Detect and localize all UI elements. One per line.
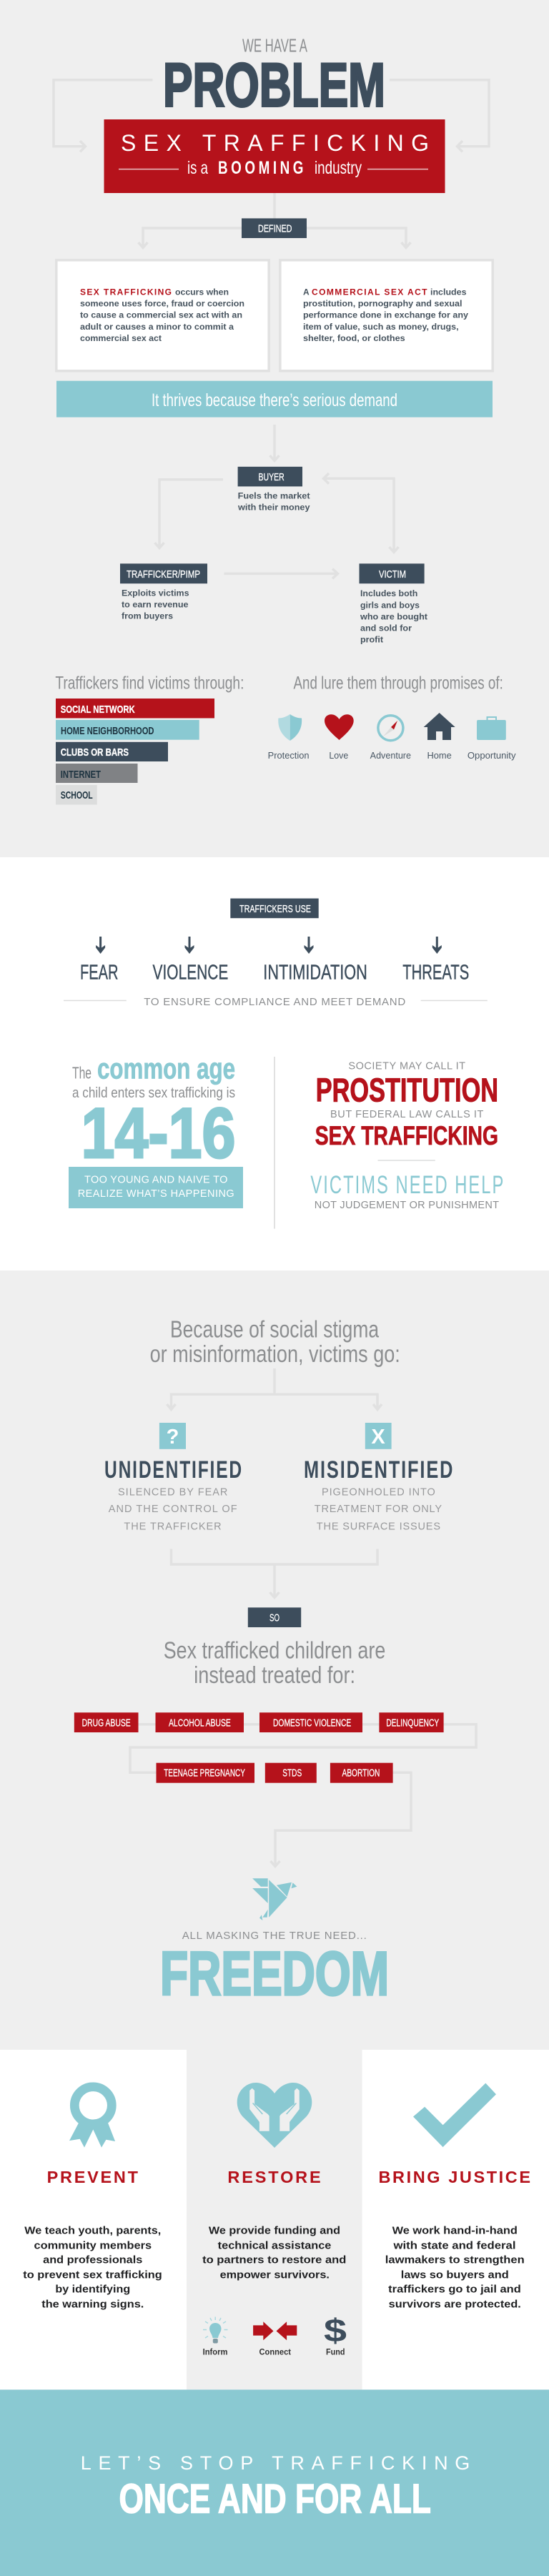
bar: internet: INTERNET	[61, 769, 101, 781]
body: prevent: We teach youth, parents,	[24, 2224, 161, 2236]
connector: treatment chain	[130, 1724, 476, 1866]
icon: home: Home	[427, 751, 452, 761]
body: prevent	[23, 2224, 162, 2310]
definition card: commercial sex act	[280, 260, 493, 371]
tag: alcohol abuse	[156, 1712, 244, 1732]
icon: love heart: Love	[329, 751, 348, 761]
body: restore: technical assistance	[218, 2239, 331, 2251]
item: threats	[402, 937, 469, 984]
icon: love heart	[325, 714, 354, 761]
label: so	[248, 1607, 301, 1627]
heading: problem: PROBLEM	[163, 51, 385, 120]
node: buyer: Fuels the market	[238, 491, 310, 501]
stat: 14-16: 14-16	[81, 1093, 236, 1173]
icon: fund dollar: $	[324, 2312, 347, 2349]
panel: treated for	[74, 1712, 476, 1866]
definition card: sex trafficking: someone uses force, fraud or coercion	[80, 299, 244, 309]
heading: freedom: FREEDOM	[160, 1940, 389, 2008]
panel: call to action	[0, 2389, 549, 2576]
tag: teenage pregnancy: TEENAGE PREGNANCY	[164, 1767, 245, 1780]
tag: teenage pregnancy	[156, 1763, 254, 1783]
definition card: sex trafficking: adult or causes a minor to commit a	[80, 322, 234, 332]
heading: instead treated for: instead treated for:	[194, 1662, 355, 1688]
label: so: SO	[269, 1612, 280, 1624]
definition card: sex trafficking	[56, 260, 269, 371]
item: violence	[153, 937, 228, 984]
icon: protection shield	[268, 714, 310, 761]
node: buyer: with their money	[237, 503, 310, 513]
text: sex trafficking: SEX TRAFFICKING	[315, 1121, 498, 1150]
icon: opportunity briefcase: Opportunity	[468, 751, 516, 761]
definition card: sex trafficking: SEX TRAFFICKING	[80, 287, 172, 297]
node: trafficker/pimp: TRAFFICKER/PIMP	[127, 568, 200, 581]
banner: serious demand: It thrives because there’s serious demand	[152, 390, 397, 410]
node: trafficker/pimp: to earn revenue	[122, 599, 189, 609]
bar chart: where traffickers find victims	[55, 673, 244, 805]
definition card: commercial sex act: COMMERCIAL SEX ACT	[312, 287, 427, 297]
panel: prevent	[0, 2050, 187, 2389]
body: bring justice	[385, 2224, 525, 2310]
banner: sex trafficking is a booming industry: SEX TRAFFICKING	[121, 130, 429, 156]
panel: misidentified	[104, 1316, 454, 1688]
banner: sex trafficking is a booming industry: industry	[315, 158, 362, 178]
column: unidentified: UNIDENTIFIED	[104, 1456, 243, 1484]
icon: origami bird	[252, 1878, 297, 1920]
panel: lures	[268, 673, 516, 761]
item: violence: VIOLENCE	[153, 961, 228, 984]
icon: home	[424, 713, 455, 761]
column: misidentified: TREATMENT FOR ONLY	[315, 1504, 442, 1515]
icon: connect arrows	[253, 2321, 297, 2357]
icon: protection shield: Protection	[268, 751, 310, 761]
panel: prostitution vs sex trafficking	[310, 1060, 505, 1211]
bar: clubs or bars	[56, 742, 168, 761]
column: unidentified	[104, 1423, 243, 1532]
definition card: sex trafficking: occurs when	[175, 287, 229, 297]
body: bring justice: with state and federal	[392, 2239, 516, 2251]
tag: alcohol abuse: ALCOHOL ABUSE	[169, 1717, 231, 1729]
text: the: The	[72, 1064, 92, 1082]
definition card: sex trafficking: commercial sex act	[80, 333, 162, 343]
tag: stds	[265, 1763, 317, 1783]
heading: bring justice: BRING JUSTICE	[379, 2168, 530, 2186]
body: restore: to partners to restore and	[202, 2254, 346, 2266]
body: prevent: to prevent sex trafficking	[23, 2269, 162, 2281]
item: intimidation: INTIMIDATION	[263, 961, 367, 984]
tag: stds: STDS	[282, 1767, 302, 1780]
heading: instead treated for: Sex trafficked children are	[164, 1637, 385, 1664]
text: all masking: ALL MASKING THE TRUE NEED...	[182, 1930, 367, 1942]
banner: serious demand	[56, 381, 493, 418]
node: trafficker/pimp: Exploits victims	[122, 588, 189, 598]
item: threats: THREATS	[402, 961, 469, 984]
definition card: commercial sex act: item of value, such as money, drugs,	[303, 322, 459, 332]
icon: adventure compass	[370, 716, 411, 761]
bar: home neighborhood	[56, 720, 199, 740]
tag: drug abuse: DRUG ABUSE	[82, 1717, 131, 1729]
tag: abortion	[330, 1763, 393, 1783]
body: restore: empower survivors.	[220, 2269, 330, 2281]
body: bring justice: laws so buyers and	[401, 2269, 509, 2281]
column: misidentified: PIGEONHOLED INTO	[322, 1487, 435, 1499]
node: victim: Includes both	[360, 588, 417, 598]
item: intimidation	[263, 937, 367, 984]
callout: too young	[69, 1167, 243, 1208]
column: misidentified: MISIDENTIFIED	[304, 1456, 454, 1484]
text: not judgement: NOT JUDGEMENT OR PUNISHMENT	[315, 1200, 499, 1211]
column: misidentified: THE SURFACE ISSUES	[317, 1521, 440, 1532]
node: victim: who are bought	[360, 611, 427, 621]
body: prevent: and professionals	[43, 2254, 142, 2266]
column: unidentified: SILENCED BY FEAR	[118, 1487, 227, 1499]
flow arrow: title to red box left	[54, 80, 153, 152]
arrow: trafficker to victim	[224, 569, 337, 578]
icon: fund dollar	[324, 2312, 347, 2357]
flow arrow: title to red box right	[390, 80, 489, 152]
column: unidentified: THE TRAFFICKER	[124, 1521, 222, 1532]
tag: domestic violence: DOMESTIC VIOLENCE	[273, 1717, 351, 1729]
text: let's stop trafficking: LET’S STOP TRAFFICKING	[81, 2452, 470, 2474]
icon: inform bulb	[203, 2316, 227, 2357]
divider: vertical	[274, 1057, 275, 1229]
arrow: demand to buyer	[270, 425, 279, 460]
label: defined	[242, 218, 307, 238]
text: common age: common age	[97, 1052, 235, 1085]
caption: ensure compliance: TO ENSURE COMPLIANCE AND MEET DEMAND	[144, 996, 405, 1008]
tag: domestic violence	[259, 1712, 362, 1732]
column: misidentified: X	[371, 1426, 385, 1449]
body: bring justice: We work hand-in-hand	[392, 2224, 518, 2236]
label: traffickers use	[230, 899, 319, 918]
panel: the problem	[54, 36, 493, 418]
heading: we have a: WE HAVE A	[242, 36, 307, 56]
icon: opportunity briefcase	[468, 717, 516, 761]
icon: ribbon	[69, 2087, 115, 2148]
node: buyer	[237, 467, 310, 513]
panel: bring justice	[362, 2050, 549, 2389]
body: bring justice: survivors are protected.	[389, 2298, 521, 2310]
icon: inform bulb: Inform	[203, 2349, 227, 2357]
definition card: commercial sex act: includes	[430, 287, 467, 297]
text: society may call it: SOCIETY MAY CALL IT	[348, 1060, 465, 1072]
definition card: sex trafficking: to cause a commercial sex act with an	[80, 310, 242, 320]
column: misidentified	[304, 1423, 454, 1532]
tag: abortion: ABORTION	[342, 1767, 380, 1780]
body: restore	[202, 2224, 346, 2281]
definition card: commercial sex act: performance done in exchange for any	[303, 310, 468, 320]
node: victim	[359, 563, 427, 645]
node: victim: girls and boys	[360, 600, 420, 610]
diagram: buyer, trafficker, victim cycle	[120, 425, 427, 645]
banner: sex trafficking is a booming industry: BOOMING	[218, 158, 307, 178]
flow arrows: defined branches	[139, 193, 410, 247]
bar: social network	[56, 699, 214, 718]
label: traffickers use: TRAFFICKERS USE	[239, 903, 311, 915]
icon: adventure compass: Adventure	[370, 751, 411, 761]
label: defined: DEFINED	[258, 223, 292, 235]
column: unidentified: ?	[167, 1426, 179, 1449]
text: a child enters: a child enters sex trafficking is	[72, 1085, 235, 1101]
heading: prevent: PREVENT	[47, 2168, 139, 2186]
callout: too young: TOO YOUNG AND NAIVE TO	[84, 1174, 227, 1185]
node: victim: profit	[360, 635, 383, 645]
panel: traffickers use	[64, 899, 488, 1008]
panel: freedom	[160, 1878, 389, 2008]
icon: check mark	[413, 2083, 496, 2147]
column: unidentified: AND THE CONTROL OF	[109, 1504, 237, 1515]
flow arrows: split	[167, 1368, 382, 1410]
banner: sex trafficking is a booming industry	[104, 119, 445, 193]
bar: school	[56, 785, 97, 805]
chart heading: Traffickers find victims through:	[55, 673, 244, 694]
bar: clubs or bars: CLUBS OR BARS	[61, 746, 129, 759]
icon: fund dollar: Fund	[326, 2349, 345, 2357]
icon: hands in heart	[237, 2083, 312, 2148]
panel: common age	[69, 1052, 243, 1208]
body: restore: We provide funding and	[209, 2224, 340, 2236]
item: fear: FEAR	[80, 961, 119, 984]
heading: restore: RESTORE	[227, 2168, 321, 2186]
icon: connect arrows: Connect	[259, 2349, 291, 2357]
definition card: commercial sex act: A	[303, 287, 310, 297]
heading: once and for all: ONCE AND FOR ALL	[119, 2477, 431, 2522]
node: buyer: BUYER	[259, 471, 285, 483]
bar: internet	[56, 764, 137, 783]
body: bring justice: traffickers go to jail and	[388, 2283, 521, 2295]
node: trafficker/pimp	[120, 563, 207, 621]
banner: sex trafficking is a booming industry: is a	[187, 158, 208, 178]
arrow: victim and buyer link	[323, 473, 399, 552]
item: fear	[80, 937, 119, 984]
tag: delinquency	[379, 1712, 444, 1732]
tag: delinquency: DELINQUENCY	[386, 1717, 439, 1729]
definition card: commercial sex act: shelter, food, or clothes	[303, 333, 405, 343]
node: trafficker/pimp: from buyers	[122, 611, 173, 621]
callout: too young: REALIZE WHAT’S HAPPENING	[78, 1188, 234, 1200]
heading: social stigma: or misinformation, victims go:	[150, 1341, 400, 1367]
definition card: commercial sex act: prostitution, pornography and sexual	[303, 299, 462, 309]
arrow: buyer to trafficker	[154, 480, 223, 548]
body: prevent: community members	[34, 2239, 152, 2251]
tag: drug abuse	[74, 1712, 139, 1732]
heading: social stigma: Because of social stigma	[170, 1316, 380, 1342]
panel: white section	[0, 857, 549, 1270]
bar: social network: SOCIAL NETWORK	[61, 704, 135, 716]
heading: instead treated for	[164, 1637, 385, 1688]
body: prevent: the warning signs.	[41, 2298, 144, 2310]
node: victim: VICTIM	[379, 568, 406, 581]
text: but federal law: BUT FEDERAL LAW CALLS IT	[330, 1109, 484, 1120]
bar: school: SCHOOL	[61, 789, 93, 801]
flow arrows: merge	[172, 1549, 377, 1597]
panel: restore	[202, 2083, 347, 2357]
body: bring justice: lawmakers to strengthen	[385, 2254, 525, 2266]
body: prevent: by identifying	[55, 2283, 130, 2295]
node: victim: and sold for	[360, 623, 412, 633]
bar: home neighborhood: HOME NEIGHBORHOOD	[61, 725, 154, 737]
heading: social stigma	[150, 1316, 400, 1367]
